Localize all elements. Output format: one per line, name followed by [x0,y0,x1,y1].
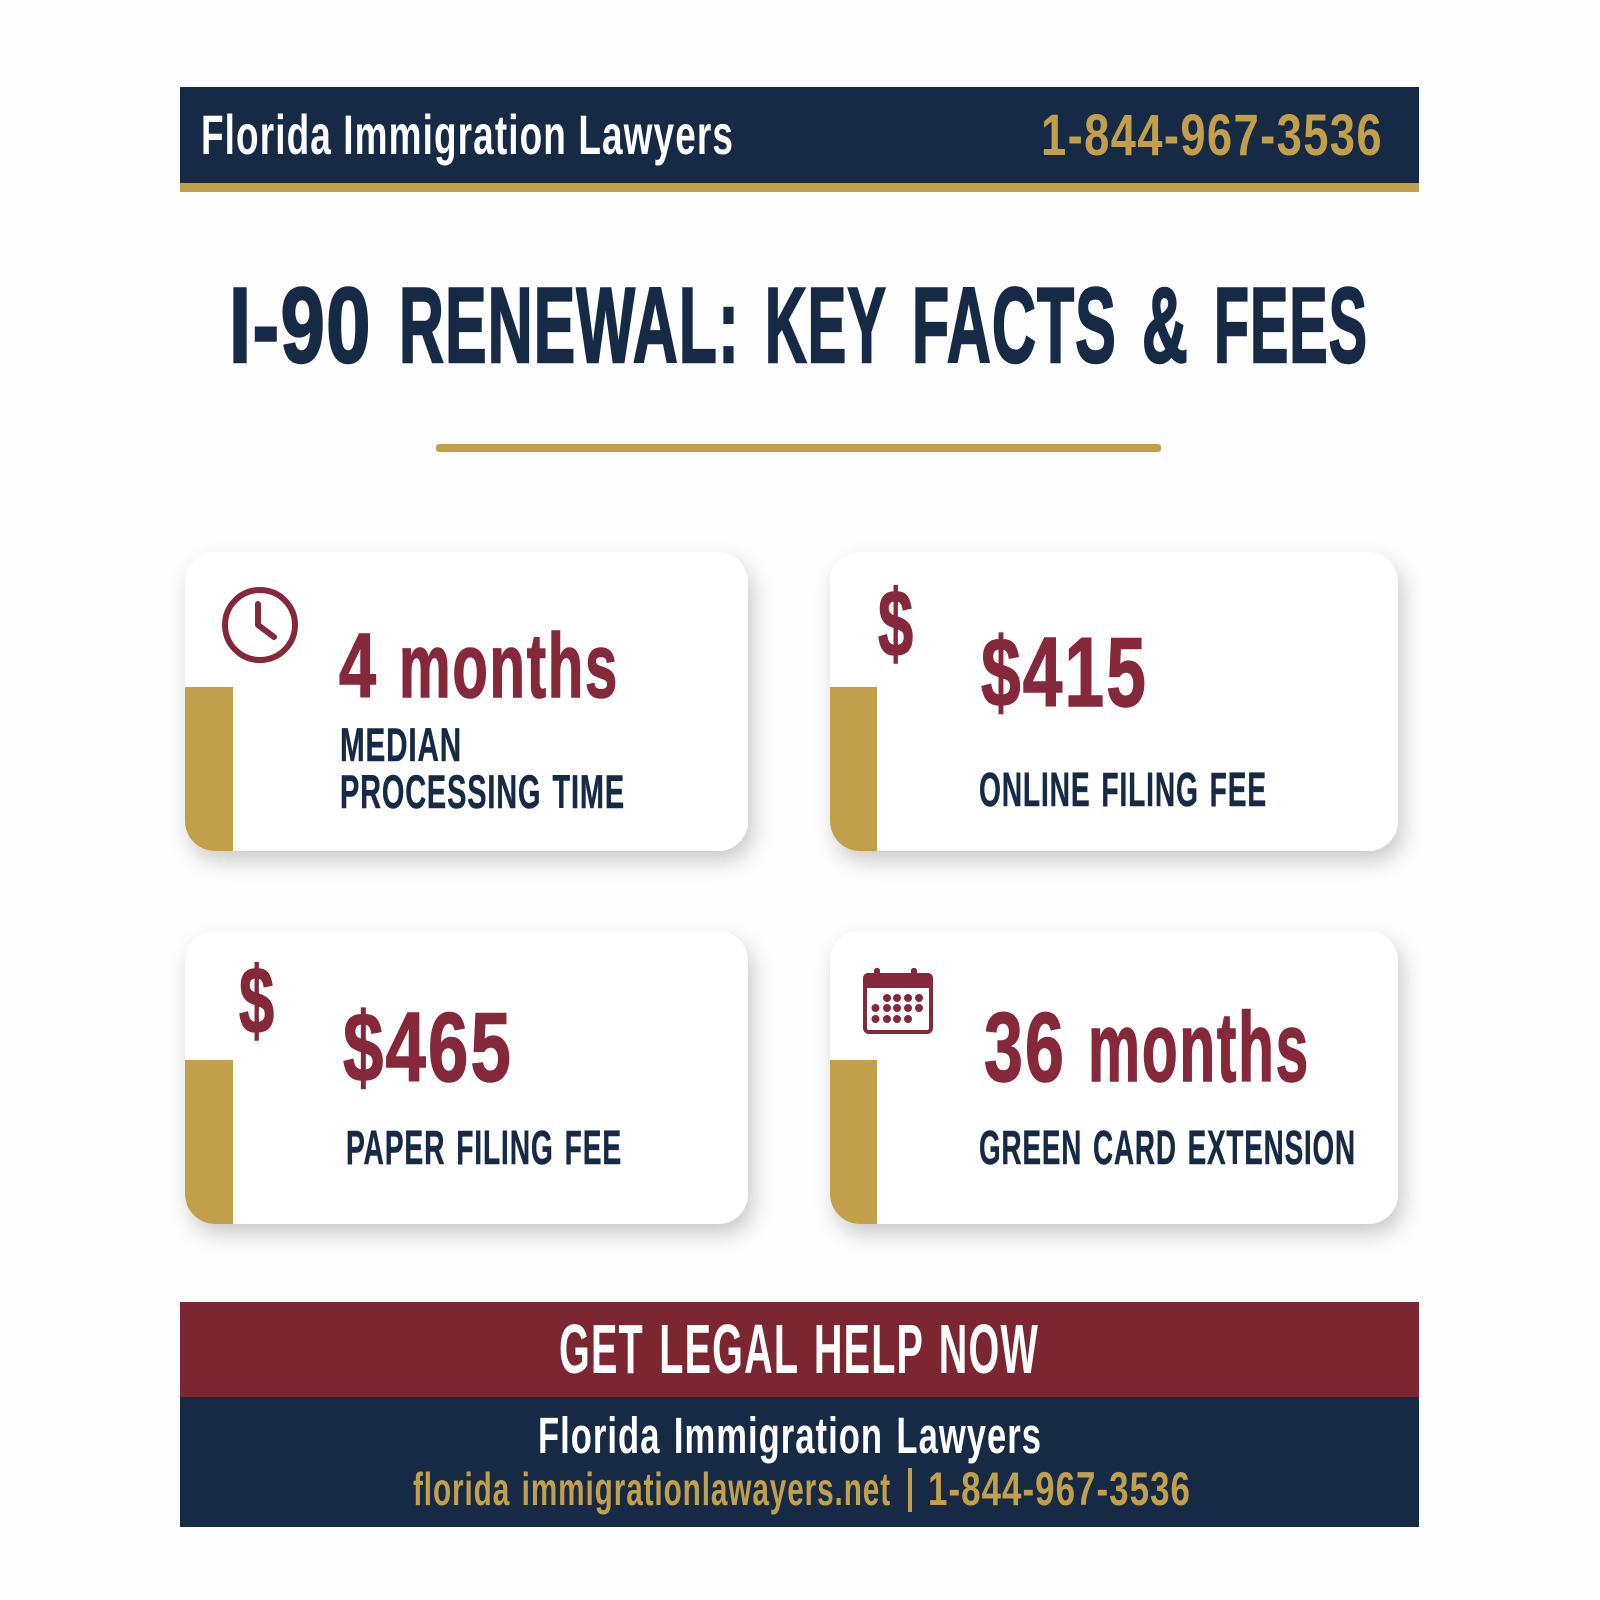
card body [830,552,1398,851]
icon: calendar [863,968,933,1032]
icon: dollar sign: $ [878,571,915,677]
header bar [180,87,1419,192]
icon: clock [225,590,295,660]
value: 36 months [984,992,1310,1102]
value: $465: $465 [343,992,513,1102]
title: KEY [765,265,887,385]
footer separator [908,1468,912,1512]
footer website: florida immigrationlawayers.net [413,1463,891,1515]
panel: green card extension [830,931,1398,1224]
title: I-90 [229,265,372,385]
title [229,265,1368,385]
title underline [436,444,1161,452]
gold accent bar [830,687,877,851]
gold accent bar [830,1060,877,1224]
value: 36 months: 36 [984,992,1066,1102]
title: FEES [1214,265,1368,385]
header phone number: 1-844-967-3536 [1041,103,1383,168]
card body [185,552,748,851]
label: paper filing fee: PAPER FILING FEE [346,1122,622,1175]
value: 4 months: 4 [339,616,378,717]
panel: online filing fee [830,552,1398,851]
card body [830,931,1398,1224]
value: 4 months [339,616,619,717]
footer firm name: Florida Immigration Lawyers [538,1407,1042,1464]
title: & [1142,265,1189,385]
call to action heading: GET LEGAL HELP NOW [559,1310,1039,1388]
value: $415: $415 [981,617,1148,727]
label: median processing time [340,718,625,818]
gold accent bar [185,1060,233,1224]
panel: paper filing fee [185,931,748,1224]
title: FACTS [912,265,1117,385]
label: median processing time: PROCESSING TIME [340,765,625,818]
value: 4 months: months [399,616,619,717]
call to action banner [180,1302,1419,1398]
footer contact panel [180,1397,1419,1527]
label: median processing time: MEDIAN [340,718,462,771]
label: online filing fee: ONLINE FILING FEE [979,764,1267,817]
value: 36 months: months [1088,992,1310,1102]
gold accent bar [185,687,233,851]
title: RENEWAL: [399,265,740,385]
icon: dollar sign: $ [239,948,276,1054]
footer phone number: 1-844-967-3536 [928,1462,1191,1515]
panel: median processing time [185,552,748,851]
card body [185,931,748,1224]
header firm name: Florida Immigration Lawyers [201,103,734,166]
